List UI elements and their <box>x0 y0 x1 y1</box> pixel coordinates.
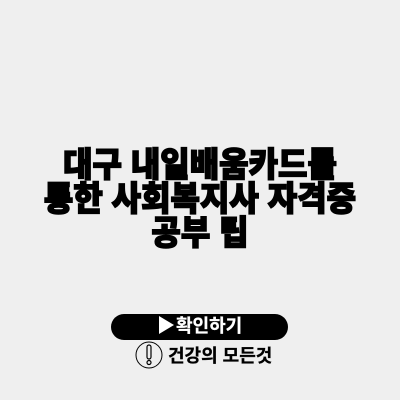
icon: exclamation circle <box>136 342 162 368</box>
button label: 확인하기 <box>176 316 242 336</box>
title: 공부 팁 <box>151 214 249 252</box>
title <box>44 146 356 252</box>
brand label: 건강의 모든것 <box>168 346 272 366</box>
button: confirm <box>111 314 288 340</box>
title: 대구 내일배움카드를 <box>63 146 337 184</box>
icon: play triangle <box>159 316 174 334</box>
title: 통한 사회복지사 자격증 <box>44 180 356 218</box>
